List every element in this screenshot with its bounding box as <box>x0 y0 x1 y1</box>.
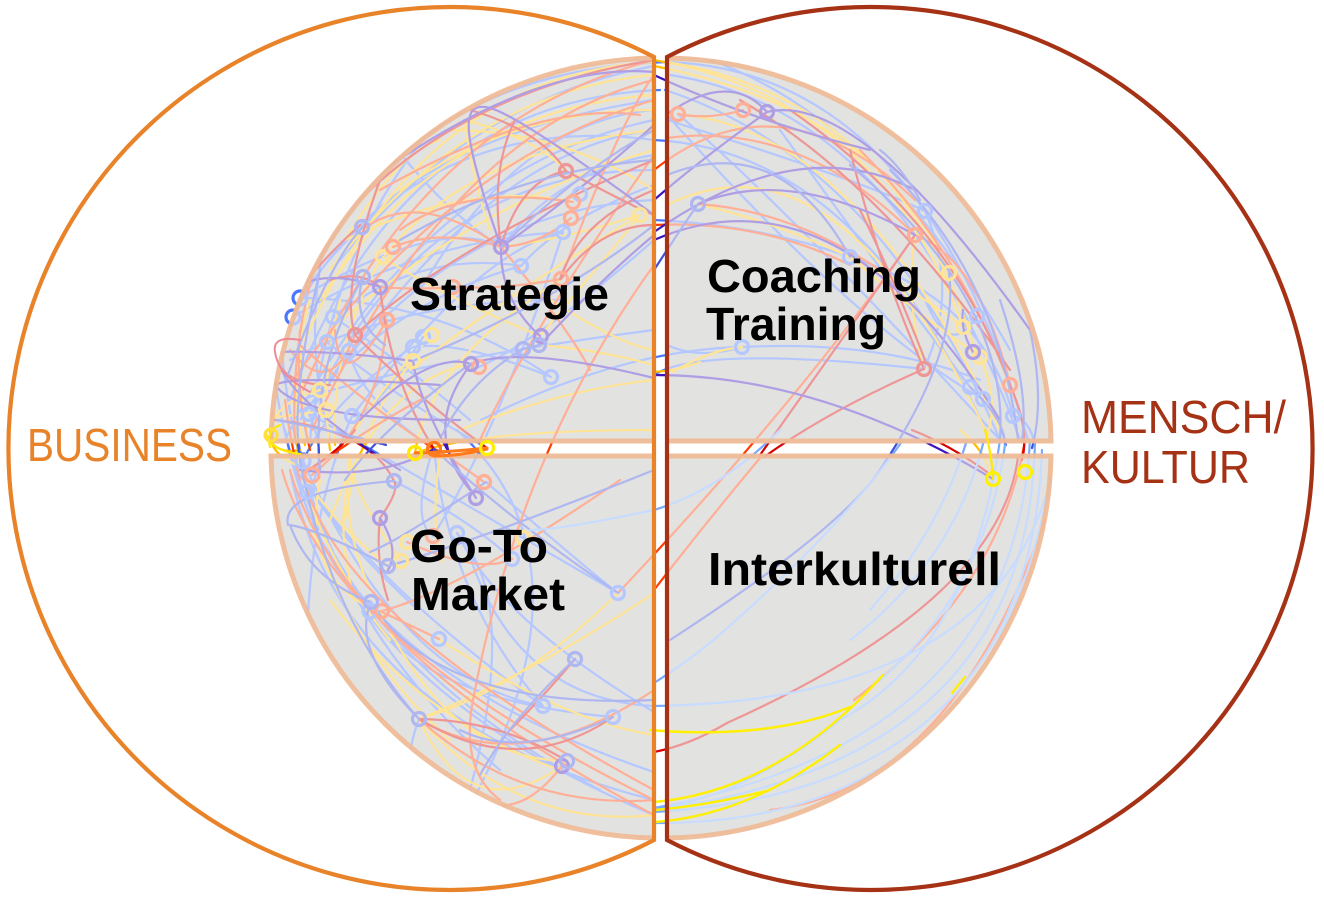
nodes: yellow <box>314 208 986 568</box>
label: Coaching Training <box>706 250 921 350</box>
lines: blue <box>275 60 1035 815</box>
nodes: periwinkle <box>356 198 704 768</box>
nodes: purple <box>374 106 980 772</box>
heading: Mensch/Kultur: KULTUR <box>1081 441 1250 493</box>
node markers: pale layer <box>286 104 1020 772</box>
heading: Business: BUSINESS <box>27 419 232 471</box>
lines: red <box>275 60 1024 761</box>
label: Strategie: Strategie <box>410 268 609 320</box>
nodes: blue <box>286 188 1020 724</box>
network of curved connection lines <box>267 60 1052 823</box>
lines: salmon <box>282 60 1045 815</box>
label: Coaching Training: Training <box>706 298 886 350</box>
grey globe base: four quadrants <box>271 58 1051 838</box>
circle: Mensch/Kultur <box>667 7 1313 890</box>
label: Interkulturell: Interkulturell <box>708 543 1001 595</box>
label: Go-To Market: Market <box>411 568 565 620</box>
heading: Mensch/Kultur <box>1081 391 1286 493</box>
lines: pale blue lower right <box>530 430 1052 823</box>
circle: Business <box>8 7 654 890</box>
label: Go-To Market <box>410 520 565 620</box>
nodes: red <box>348 164 930 376</box>
nodes: salmon <box>305 104 1016 618</box>
lines: yellow <box>267 60 1000 817</box>
label: Go-To Market: Go-To <box>410 520 548 572</box>
label: Coaching Training: Coaching <box>707 250 921 302</box>
nodes: saturated yellow and orange <box>265 429 1032 486</box>
quadrant outlines <box>271 58 1051 838</box>
heading: Mensch/Kultur: MENSCH/ <box>1081 391 1286 443</box>
saturated yellow, red and orange highlights <box>266 339 993 822</box>
lines: periwinkle <box>277 130 1038 775</box>
screen veil that pales the lines inside the quadrants <box>271 58 1051 838</box>
lines: purple <box>275 71 1030 570</box>
